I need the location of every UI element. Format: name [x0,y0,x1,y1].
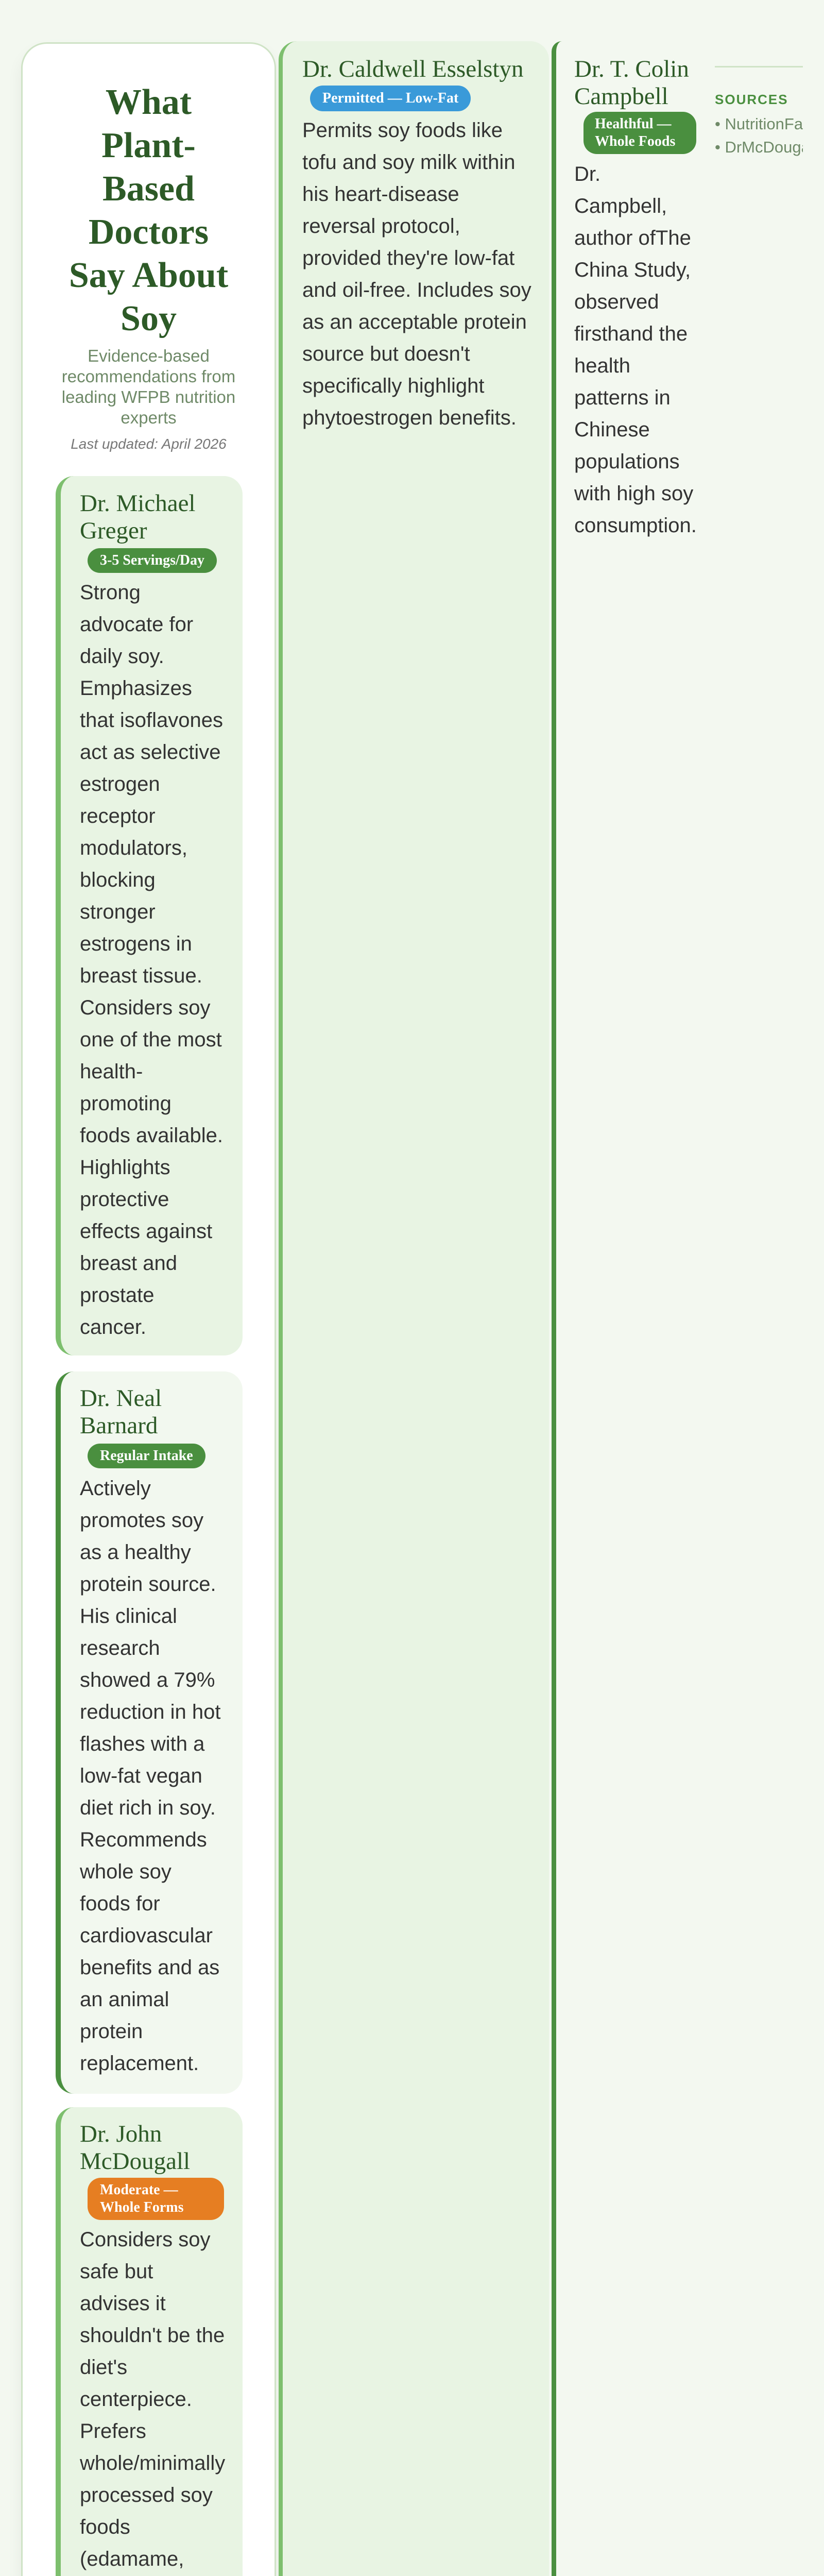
name: Barnard [80,1412,158,1439]
description: advises it [80,2292,166,2315]
description: cancer. [80,1316,146,1338]
description: diet rich in soy. [80,1797,216,1819]
description: estrogen [80,773,160,795]
badge [88,2178,224,2220]
badge [583,112,696,154]
description: consumption. [574,514,697,537]
description: foods available. [80,1124,223,1147]
description: Prefers [80,2420,146,2443]
description: Considers soy [80,996,210,1019]
title: Based [102,169,195,209]
description: foods [80,2516,130,2538]
description: (edamame, [80,2548,184,2570]
description: daily soy. [80,645,164,668]
description: whole soy [80,1860,171,1883]
name: Dr. T. Colin [574,56,689,82]
badge: Moderate — [100,2182,178,2198]
badge: Whole Forms [100,2199,184,2215]
description: health [574,354,630,377]
name: Campbell [574,83,668,110]
description: low-fat vegan [80,1765,202,1787]
panel: sources [715,66,803,156]
description: phytoestrogen benefits. [302,406,517,429]
description: Highlights [80,1156,170,1179]
name [80,2121,190,2175]
badge: Healthful — [595,116,672,132]
description: one of the most [80,1028,222,1051]
description: estrogens in [80,933,192,955]
description: observed [574,291,659,313]
panel: Dr. T. Colin Campbell [552,41,706,2576]
title: Say About [69,256,228,295]
name: Dr. Caldwell Esselstyn [302,56,523,82]
description: His clinical [80,1605,177,1628]
description: protein [80,2020,143,2043]
badge [88,548,217,573]
description: advocate for [80,613,193,636]
description: source but doesn't [302,343,470,365]
description [80,1477,221,2075]
description: safe but [80,2260,153,2283]
description: as an acceptable protein [302,311,527,333]
description [80,2228,226,2570]
description: Campbell, [574,195,667,217]
card: Dr. Neal Barnard [56,1371,243,2094]
description: modulators, [80,837,187,859]
name: Greger [80,517,147,544]
description: promotes soy [80,1509,203,1532]
title: Soy [121,299,177,338]
description: with high soy [574,482,693,505]
description: showed a 79% [80,1669,215,1691]
subtitle [62,346,235,427]
badge: Whole Foods [595,133,675,149]
description: diet's [80,2356,127,2379]
last updated: Last updated: April 2026 [71,436,227,452]
subtitle: recommendations from [62,367,235,386]
name: Dr. John [80,2121,162,2147]
description: foods for [80,1892,160,1915]
description: author ofThe [574,227,691,249]
description: benefits and as [80,1956,219,1979]
title: What [106,82,192,122]
description: health- [80,1060,143,1083]
name [574,56,689,110]
name [80,1385,162,1439]
description: protein source. [80,1573,216,1596]
description: shouldn't be the [80,2324,225,2347]
subtitle: experts [121,408,177,427]
badge: 3-5 Servings/Day [100,552,204,568]
badge [310,86,471,111]
description: tofu and soy milk within [302,151,516,174]
title [69,82,228,338]
description: firsthand the [574,323,688,345]
description: processed soy [80,2484,213,2506]
description: reversal protocol, [302,215,460,238]
description: his heart-disease [302,183,459,206]
card: Dr. John McDougall [56,2107,243,2576]
description: protective [80,1188,169,1211]
description: Emphasizes [80,677,192,700]
description: research [80,1637,160,1659]
sources heading: SOURCES [715,92,788,107]
description: populations [574,450,680,473]
subtitle: Evidence-based [88,346,210,365]
sources list [715,115,803,156]
description: as a healthy [80,1541,191,1564]
name [80,490,196,544]
badge: Permitted — Low-Fat [322,90,458,106]
description: cardiovascular [80,1924,213,1947]
card: Dr. Michael Greger [56,476,243,1355]
description: Dr. [574,163,600,185]
description: breast and [80,1252,177,1275]
description: flashes with a [80,1733,204,1755]
name: Dr. Michael [80,490,196,517]
description: provided they're low-fat [302,247,514,269]
title: Doctors [89,212,209,252]
description: receptor [80,805,156,827]
description [80,581,223,1338]
description: Chinese [574,418,650,441]
description: that isoflavones [80,709,223,732]
description: patterns in [574,386,671,409]
name: McDougall [80,2148,190,2175]
description [302,119,531,429]
description: China Study, [574,259,691,281]
description: prostate [80,1284,154,1307]
description: centerpiece. [80,2388,192,2411]
description: stronger [80,901,156,923]
description: replacement. [80,2052,199,2075]
description: reduction in hot [80,1701,221,1723]
panel: intro and doctor cards [21,42,276,2576]
badge: Regular Intake [100,1448,193,1464]
description: blocking [80,869,156,891]
description: Permits soy foods like [302,119,503,142]
title: Plant- [101,126,196,165]
panel: Dr. Caldwell Esselstyn [279,41,549,2576]
description [574,163,697,537]
description: Strong [80,581,141,604]
description: an animal [80,1988,169,2011]
name: Dr. Neal [80,1385,162,1412]
description: act as selective [80,741,220,764]
description: whole/minimally [80,2452,225,2475]
description: specifically highlight [302,375,485,397]
description: and oil-free. Includes soy [302,279,531,301]
description: Recommends [80,1828,207,1851]
description: Actively [80,1477,151,1500]
subtitle: leading WFPB nutrition [62,387,235,406]
description: Considers soy [80,2228,210,2251]
description: effects against [80,1220,212,1243]
badge [88,1444,205,1468]
description: promoting [80,1092,171,1115]
description: breast tissue. [80,964,202,987]
